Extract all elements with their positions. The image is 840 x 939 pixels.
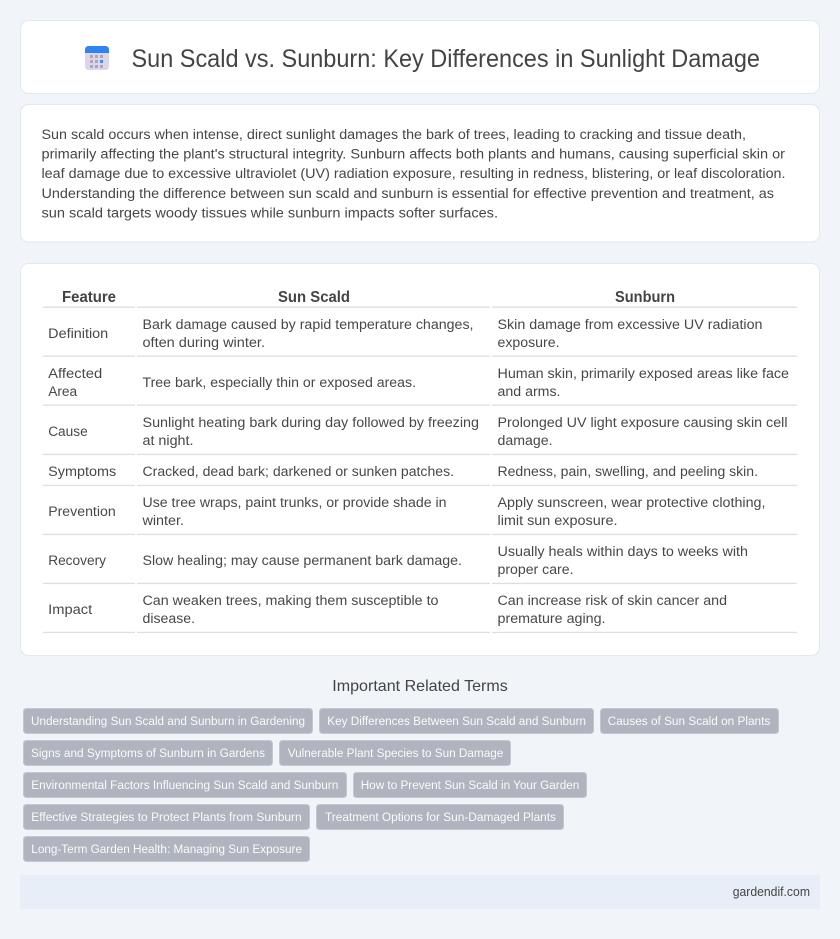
tag: [24, 804, 310, 830]
row: impact: Impact: [48, 602, 92, 618]
tag: Causes of Sun Scald on Plants: [608, 714, 770, 728]
table header row: Feature: [62, 289, 116, 306]
row: cause: Prolonged UV light exposure causing skin cell: [498, 415, 788, 431]
row: impact: disease.: [142, 611, 195, 627]
row: impact: Can weaken trees, making them susceptible to: [142, 593, 439, 609]
row: impact: Can increase risk of skin cancer and: [498, 593, 727, 609]
row: symptoms: Symptoms: [48, 464, 116, 480]
tag: Vulnerable Plant Species to Sun Damage: [288, 746, 504, 760]
row: affected area: Area: [48, 384, 77, 400]
row: prevention: Use tree wraps, paint trunks, or provide shade in: [142, 495, 446, 511]
row: cause: Sunlight heating bark during day followed by freezing: [142, 415, 479, 431]
row: affected area: and arms.: [498, 384, 560, 400]
header panel: [20, 20, 820, 94]
row: prevention: limit sun exposure.: [498, 513, 618, 529]
row: recovery: Usually heals within days to weeks with: [498, 544, 748, 560]
tag: [354, 772, 586, 798]
tag: [316, 804, 564, 830]
row: prevention: winter.: [141, 513, 184, 529]
row: recovery: Slow healing; may cause permanent bark damage.: [142, 553, 462, 569]
row: impact: [48, 593, 727, 627]
row: definition: Bark damage caused by rapid temperature changes,: [142, 317, 474, 333]
tag: [320, 708, 594, 734]
heading: important related terms: Important Related Terms: [332, 678, 508, 695]
tag: [24, 836, 310, 862]
row: prevention: [48, 495, 765, 529]
tag: [280, 740, 510, 766]
tag: [24, 708, 312, 734]
row: recovery: Recovery: [48, 553, 107, 569]
tag: Key Differences Between Sun Scald and Sunburn: [327, 714, 586, 728]
row: cause: Cause: [48, 424, 88, 440]
tag: How to Prevent Sun Scald in Your Garden: [361, 778, 579, 792]
row: affected area: Affected: [48, 366, 102, 382]
row: prevention: Prevention: [48, 504, 116, 520]
row: symptoms: [48, 464, 758, 480]
intro text block: [42, 127, 786, 221]
intro text block: Understanding the difference between sun scald and sunburn is essential for effective prevention and treatment, as: [42, 186, 774, 202]
row: affected area: Tree bark, especially thin or exposed areas.: [142, 375, 416, 391]
icon: calendar: [85, 46, 109, 70]
row: affected area: Human skin, primarily exposed areas like face: [498, 366, 789, 382]
tag: Signs and Symptoms of Sunburn in Gardens: [31, 746, 265, 760]
row: symptoms: Redness, pain, swelling, and peeling skin.: [498, 464, 758, 480]
tag: Understanding Sun Scald and Sunburn in Gardening: [31, 714, 305, 728]
footer source text: gardendif.com: [733, 884, 810, 899]
row: recovery: proper care.: [498, 562, 574, 578]
panel: intro paragraph: [20, 104, 820, 242]
row: recovery: [48, 544, 748, 578]
intro text block: Sun scald occurs when intense, direct sunlight damages the bark of trees, leading to cracking and tissue death,: [42, 127, 746, 143]
tag: Effective Strategies to Protect Plants from Sunburn: [31, 810, 302, 824]
row: prevention: Apply sunscreen, wear protective clothing,: [498, 495, 766, 511]
tag: [24, 772, 346, 798]
row: cause: damage.: [498, 433, 552, 449]
tag: Environmental Factors Influencing Sun Scald and Sunburn: [31, 778, 338, 792]
intro text block: primarily affecting the plant's structural integrity. Sunburn affects both plants and humans, causing superficial skin or: [42, 147, 785, 163]
tag: [24, 740, 272, 766]
table header row: [62, 289, 675, 306]
tag: [600, 708, 778, 734]
row: affected area: [48, 366, 789, 400]
footer bar: [20, 875, 820, 909]
row: definition: Definition: [48, 326, 108, 342]
panel: comparison table: [20, 264, 820, 656]
tag: Long-Term Garden Health: Managing Sun Exposure: [31, 842, 302, 856]
title: Sun Scald vs. Sunburn: Key Differences in Sunlight Damage: [132, 45, 760, 73]
row: cause: at night.: [142, 433, 194, 449]
row: impact: premature aging.: [498, 611, 606, 627]
row: definition: often during winter.: [142, 335, 265, 351]
intro text block: sun scald targets woody tissues while sunburn impacts softer surfaces.: [42, 205, 498, 221]
row: symptoms: Cracked, dead bark; darkened or sunken patches.: [142, 464, 454, 480]
row: definition: exposure.: [498, 335, 560, 351]
intro text block: leaf damage due to excessive ultraviolet (UV) radiation exposure, resulting in redness, blistering, or leaf discoloration.: [42, 166, 786, 182]
row: cause: [48, 415, 787, 449]
row: definition: [48, 317, 762, 351]
table header row: Sunburn: [615, 289, 675, 306]
tag: Treatment Options for Sun-Damaged Plants: [325, 810, 556, 824]
table header row: Sun Scald: [278, 289, 350, 306]
related terms tags: [24, 708, 778, 862]
row: definition: Skin damage from excessive UV radiation: [498, 317, 762, 333]
